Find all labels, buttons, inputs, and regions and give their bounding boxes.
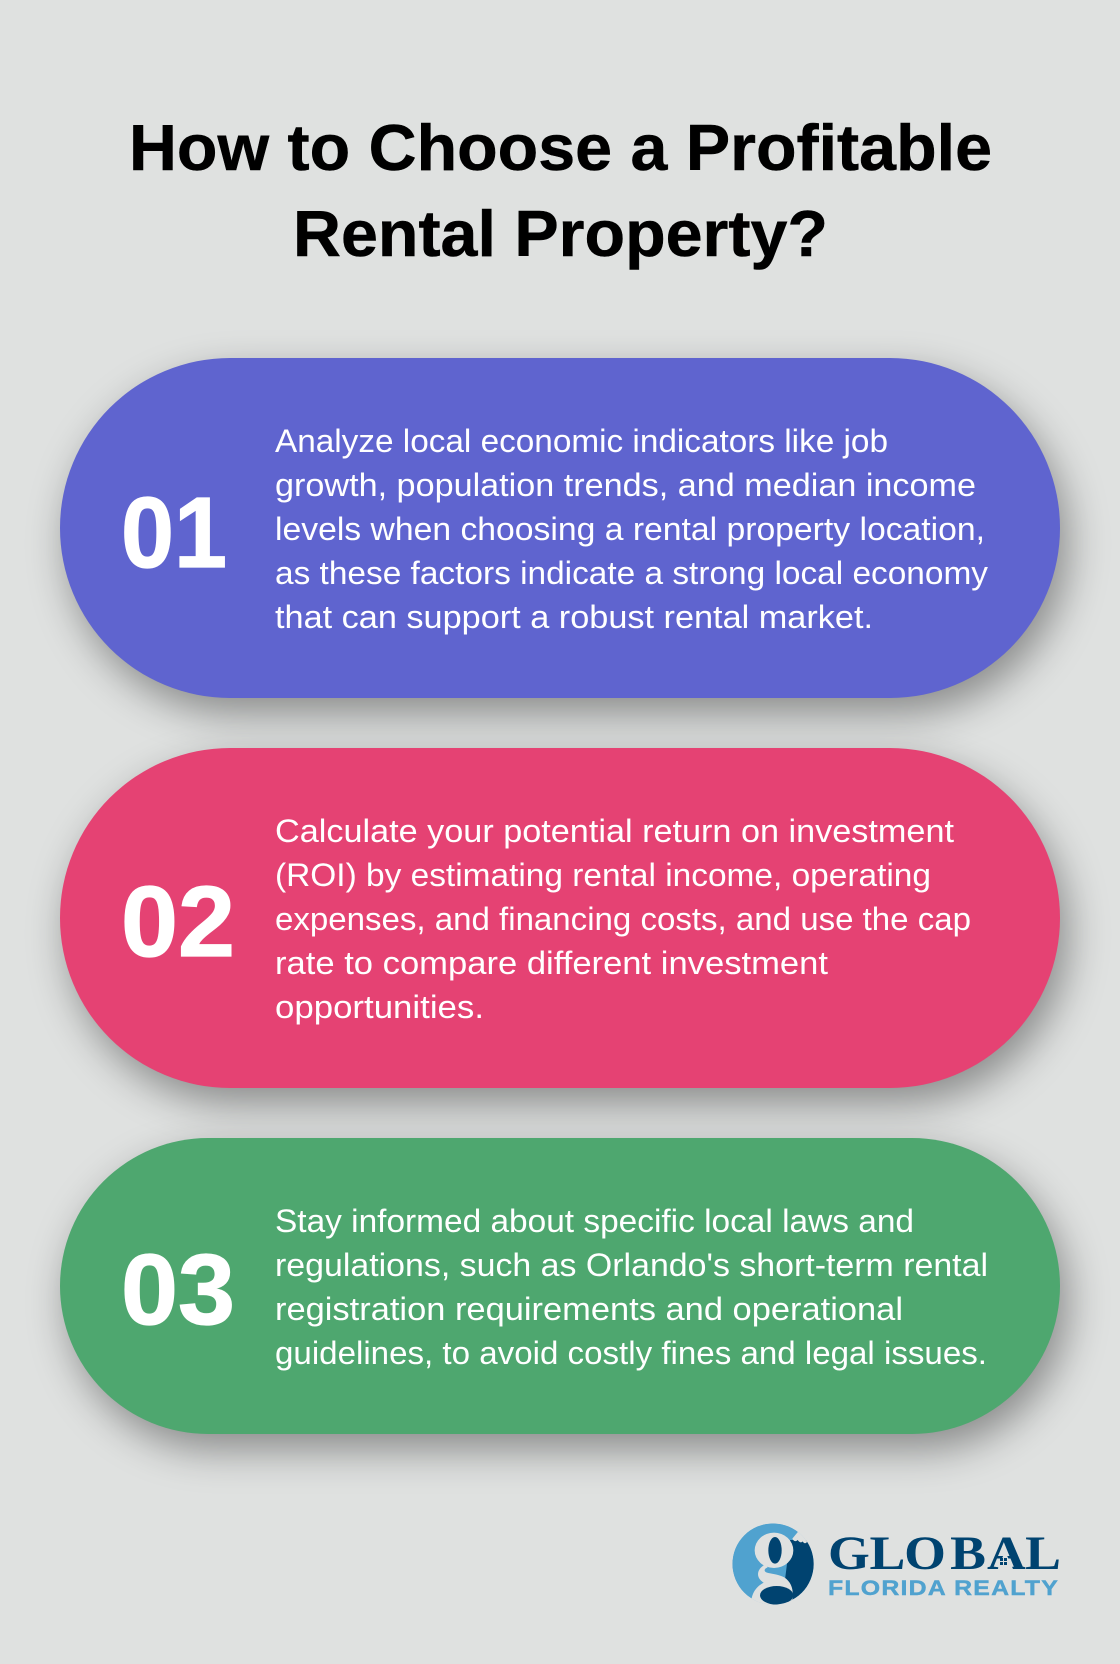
panel: step 02 [60,748,1060,1088]
step 03 text: registration requirements and operational [275,1291,903,1327]
step 03 text: regulations, such as Orlando's short-term rental [275,1247,988,1283]
panel: step 03 [60,1138,1060,1434]
step 03 text: Stay informed about specific local laws and [275,1203,914,1239]
number 01: 01 [121,477,227,589]
step 01 text: that can support a robust rental market. [275,599,873,635]
step 01 text: growth, population trends, and median income [275,467,976,503]
step 03 text [275,1203,988,1371]
number 02: 02 [121,866,235,978]
icon: g monogram [732,1523,817,1608]
logo wordmark: FLORIDA REALTY: FLORIDA REALTY [828,1577,1059,1600]
step 02 text: (ROI) by estimating rental income, operating [275,857,931,893]
logo wordmark: GLOBAL: GLOBAL [828,1528,1061,1580]
logo: Global Florida Realty [732,1524,1061,1604]
title [129,111,992,270]
step 02 text: expenses, and financing costs, and use the cap [275,901,971,937]
title: Rental Property? [293,197,828,270]
number 03: 03 [121,1234,235,1346]
step 03 text: guidelines, to avoid costly fines and legal issues. [275,1335,987,1371]
panel: step 01 [60,358,1060,698]
step 01 text [275,423,989,635]
step 01 text: as these factors indicate a strong local economy [275,555,989,591]
step 02 text: opportunities. [275,989,484,1025]
step 01 text: levels when choosing a rental property location, [275,511,985,547]
icon: house window in the A [998,1551,1013,1569]
step 02 text [275,813,971,1025]
step 02 text: Calculate your potential return on investment [275,813,954,849]
step 01 text: Analyze local economic indicators like job [275,423,888,459]
title: How to Choose a Profitable [129,111,992,184]
step 02 text: rate to compare different investment [275,945,828,981]
